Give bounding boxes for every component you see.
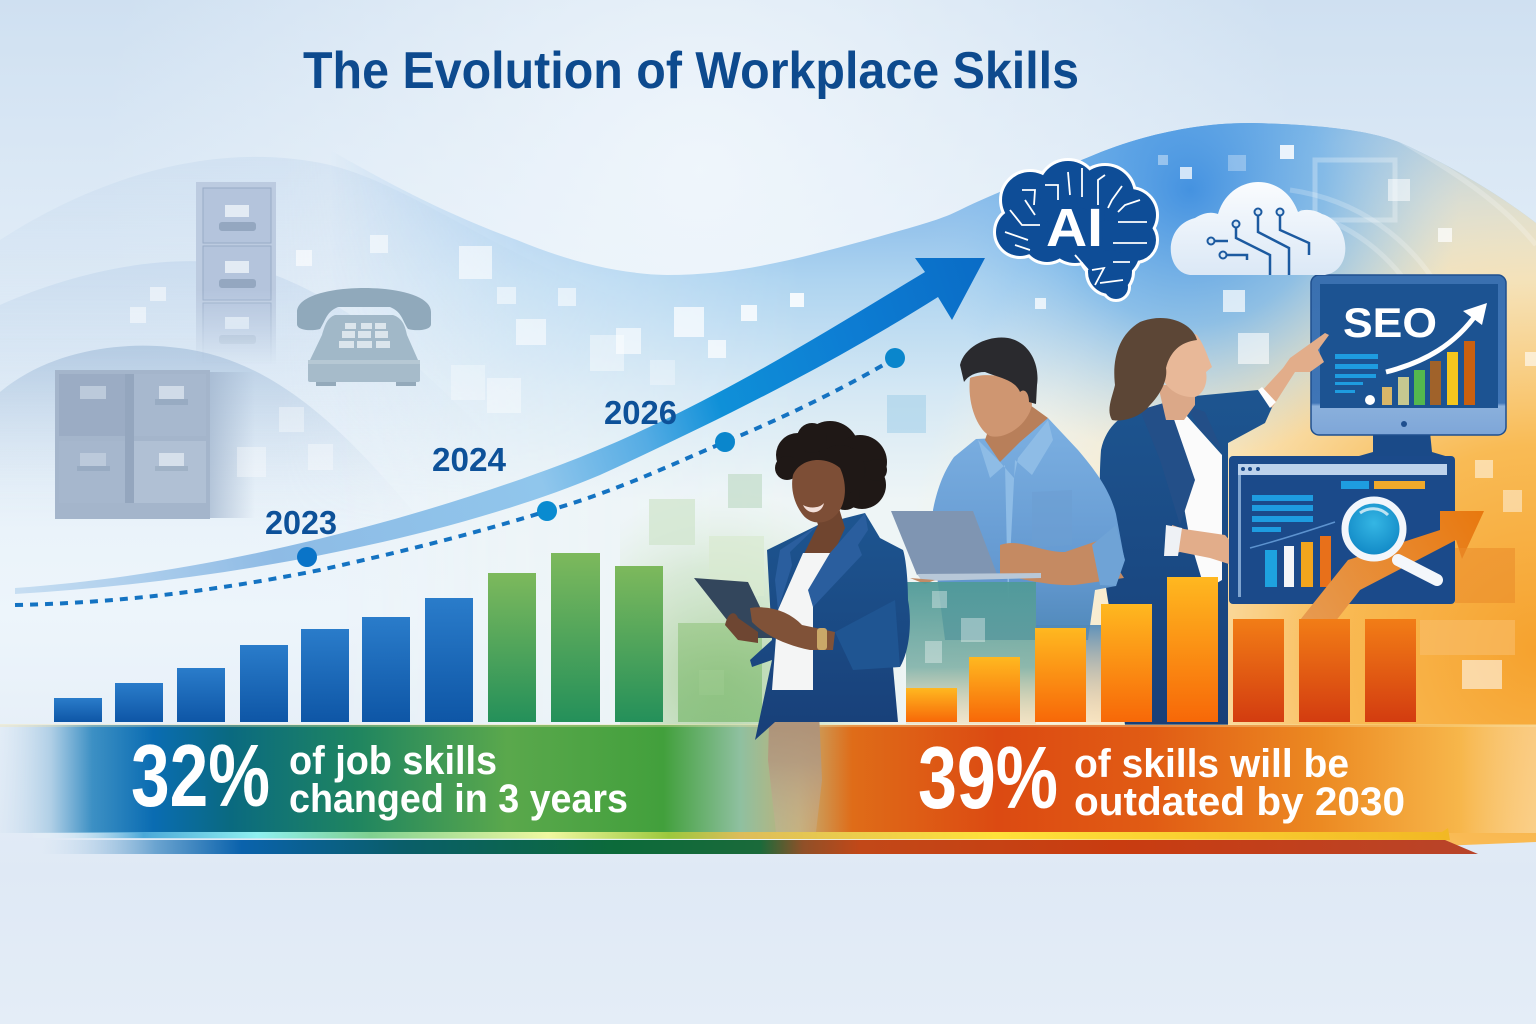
dotted timeline with milestone nodes <box>15 348 905 605</box>
sleeve cuff <box>835 600 900 670</box>
background wave right with warm glow <box>330 110 1536 850</box>
year label 2023: 2023 <box>265 504 337 541</box>
statistic: 39 percent: outdated by 2030 <box>1074 780 1405 824</box>
hair <box>1109 318 1197 420</box>
pointing arm and hand <box>1258 333 1329 408</box>
icon: AI brain <box>996 161 1156 299</box>
statistic: 39 percent: 39% <box>918 728 1058 827</box>
laptop <box>891 511 998 577</box>
face <box>1162 332 1212 397</box>
forearm and hand <box>1000 540 1124 585</box>
year label 2024: 2024 <box>432 441 507 478</box>
right lapel <box>808 513 868 607</box>
watch <box>817 628 827 650</box>
statistic: 32 percent <box>131 726 628 825</box>
statistic: 39 percent: of skills will be <box>1074 742 1349 786</box>
statistic: 39 percent <box>918 728 1405 827</box>
shirt <box>933 418 1124 640</box>
hair <box>960 337 1038 404</box>
collar <box>978 420 1053 600</box>
pants <box>768 688 822 832</box>
orange growth arrow <box>1300 511 1484 622</box>
pale teal and green squares <box>649 395 926 695</box>
warm translucent blocks right <box>1420 548 1515 655</box>
neck <box>1158 385 1195 420</box>
bar chart: orange bars <box>906 577 1416 722</box>
face <box>970 375 1032 437</box>
floating data squares <box>130 145 1536 689</box>
hair <box>775 421 887 510</box>
teal panel under laptop <box>906 582 1120 724</box>
far hand <box>725 613 758 643</box>
person: woman with tablet <box>694 421 910 832</box>
jacket <box>1100 390 1274 725</box>
statistic: 32 percent: of job skills <box>289 739 497 783</box>
tablet <box>694 578 775 638</box>
neck <box>803 505 845 557</box>
stats banner <box>0 724 1536 833</box>
icon: tall filing cabinet <box>196 182 276 356</box>
person: man with laptop <box>891 337 1125 640</box>
neck <box>985 405 1048 462</box>
icon: SEO monitor <box>1311 275 1506 458</box>
SEO label: SEO <box>1343 299 1437 346</box>
icon: circuit cloud <box>1171 182 1345 275</box>
rising timeline arrow <box>15 258 985 594</box>
statistic: 32 percent: 32% <box>131 726 270 825</box>
blouse <box>1168 415 1222 590</box>
icon: desk telephone <box>297 288 431 386</box>
left lapel <box>775 525 818 610</box>
near hand and forearm <box>750 607 835 650</box>
banner base strip <box>30 828 1478 854</box>
top <box>772 553 832 690</box>
face <box>792 460 845 523</box>
AI label: AI <box>1046 198 1103 258</box>
background waves left <box>0 157 396 478</box>
statistic: 32 percent: changed in 3 years <box>289 777 628 821</box>
person: woman pointing at screen <box>1100 318 1274 725</box>
jacket <box>750 513 910 740</box>
icon: analytics dashboard with magnifier <box>1229 456 1484 622</box>
lower hand <box>1166 525 1240 565</box>
bar chart: blue and green bars <box>54 553 762 722</box>
title: The Evolution of Workplace Skills <box>303 42 1079 100</box>
icon: wide filing cabinet <box>55 370 255 519</box>
year label 2026: 2026 <box>604 394 677 431</box>
